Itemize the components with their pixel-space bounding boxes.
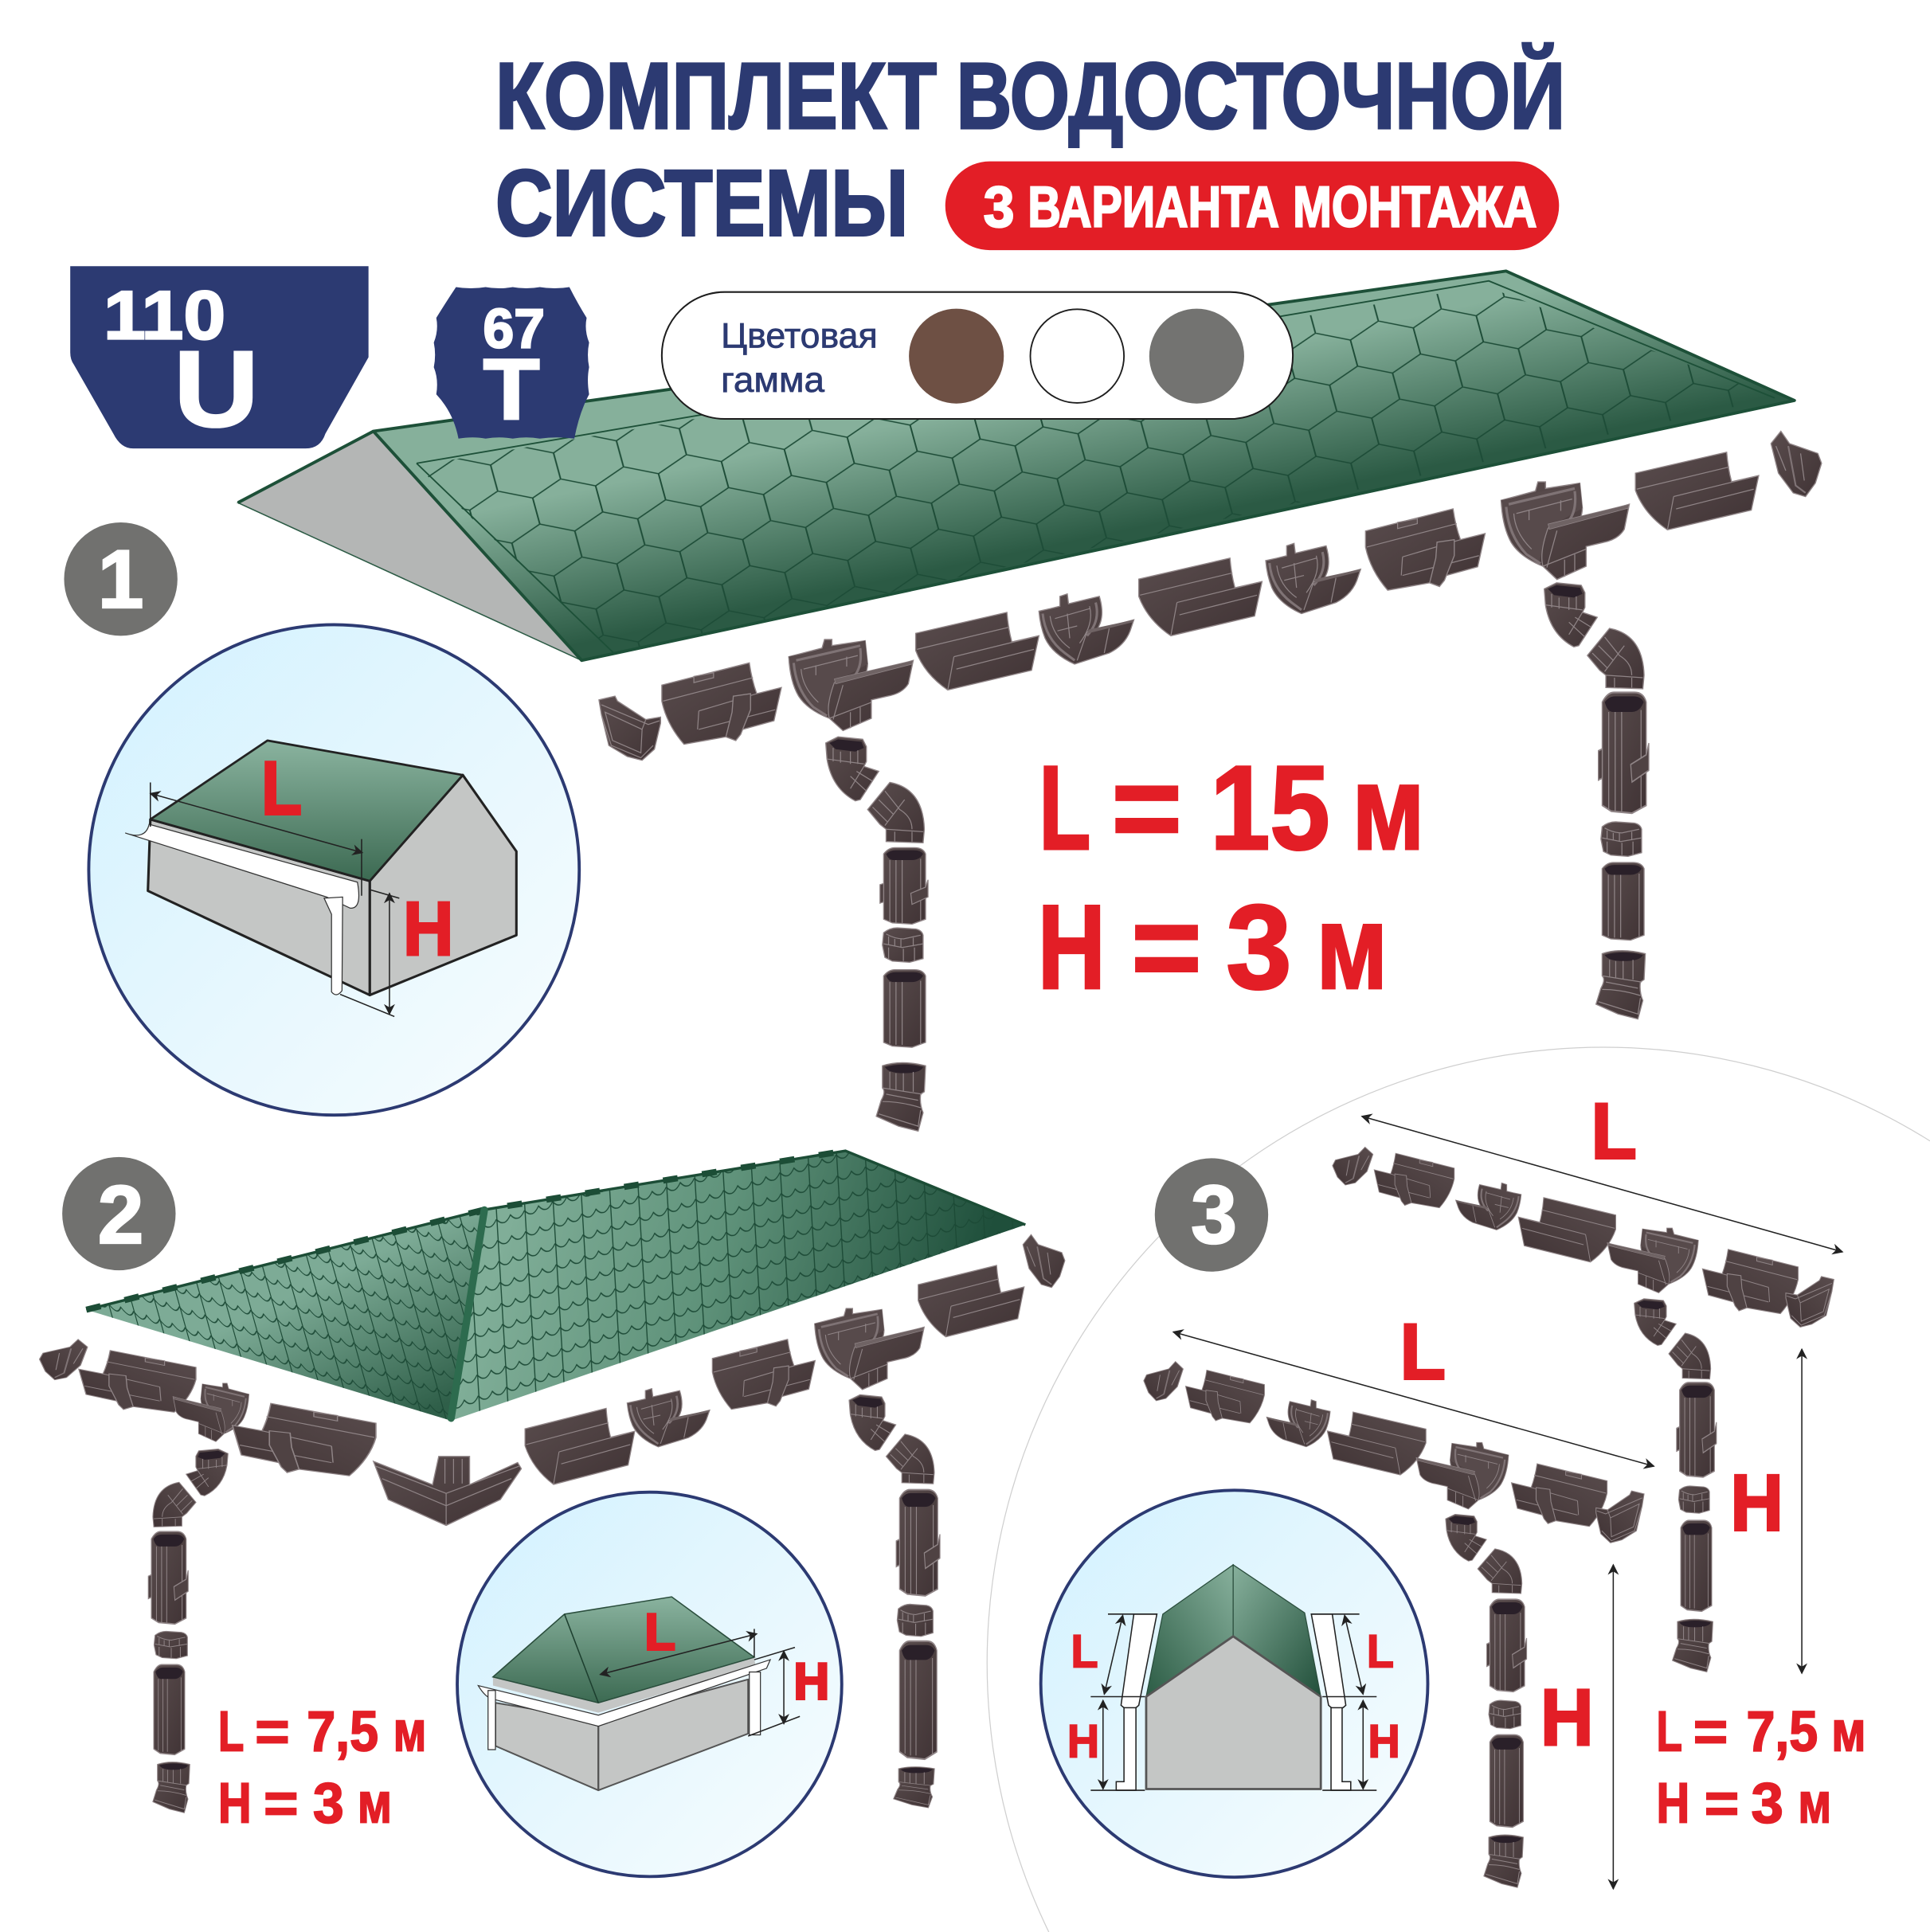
dimension H: H bbox=[403, 886, 453, 972]
dimension L: L bbox=[261, 746, 302, 831]
scheme 1 dimensions bbox=[1038, 741, 1425, 1014]
L = 7,5 м: м bbox=[1831, 1701, 1866, 1764]
end cap bbox=[599, 696, 660, 761]
number 1: 1 bbox=[98, 533, 143, 625]
L = 7,5 м: L bbox=[1657, 1701, 1682, 1764]
inset 2: hip roof house bbox=[457, 1492, 842, 1876]
inset 3: gable end view bbox=[1041, 1490, 1427, 1877]
dimension L bbox=[601, 1603, 757, 1675]
title: КОМПЛЕКТ bbox=[495, 44, 937, 148]
number 2: 2 bbox=[98, 1168, 143, 1261]
colour range label: Цветовая bbox=[721, 315, 878, 355]
connector bbox=[1039, 594, 1133, 664]
connector bbox=[627, 1389, 710, 1447]
L = 15 м: м bbox=[1352, 741, 1425, 874]
dimension H bbox=[748, 1648, 829, 1736]
gutter bbox=[1512, 1464, 1607, 1527]
end cap bbox=[1023, 1234, 1065, 1288]
L = 15 м: 15 bbox=[1210, 741, 1329, 874]
H = 3 м: 3 bbox=[313, 1772, 344, 1835]
L = 15 м bbox=[1039, 741, 1425, 874]
white gutter and pipe bbox=[125, 824, 358, 995]
scheme 2 dimensions bbox=[218, 1701, 426, 1835]
scheme 3 lower gutter line bbox=[1144, 1362, 1644, 1543]
left gutter and pipe bbox=[1116, 1614, 1157, 1790]
right dimensions bbox=[1311, 1614, 1400, 1790]
scheme 3 upper gutter line bbox=[1333, 1147, 1834, 1327]
badge: 67 T downpipe bbox=[434, 287, 589, 439]
right gutter and pipe bbox=[1311, 1614, 1351, 1790]
gutter bbox=[712, 1339, 815, 1410]
gutter bbox=[1702, 1250, 1798, 1314]
colour range label bbox=[721, 315, 878, 400]
gutter bbox=[525, 1408, 635, 1484]
left dimensions bbox=[1067, 1614, 1156, 1790]
funnel bbox=[1607, 1228, 1698, 1293]
scheme 3 upper L arrow bbox=[1362, 1086, 1842, 1252]
dimension H bbox=[340, 886, 453, 1016]
gutter bbox=[233, 1403, 376, 1476]
H = 3 м bbox=[218, 1772, 392, 1835]
scheme 3 lower H arrow: H bbox=[1540, 1673, 1594, 1762]
dimension L: L bbox=[644, 1603, 675, 1661]
L = 7,5 м: = bbox=[255, 1701, 290, 1764]
H = 3 м bbox=[1038, 880, 1388, 1014]
H = 3 м: м bbox=[358, 1772, 392, 1835]
scheme 2 left downpipe bbox=[148, 1449, 228, 1813]
L = 7,5 м: 7,5 bbox=[307, 1701, 378, 1764]
left dimensions: H bbox=[1067, 1715, 1099, 1767]
gutter bbox=[1635, 452, 1759, 530]
badge: 3 mounting options: МОНТАЖА bbox=[1293, 175, 1537, 240]
dimension L bbox=[151, 746, 362, 896]
title: СИСТЕМЫ bbox=[495, 151, 908, 256]
dimension H: H bbox=[793, 1652, 829, 1711]
connector bbox=[1266, 543, 1360, 614]
scheme 1 right downpipe bbox=[1544, 583, 1649, 1019]
H = 3 м: 3 bbox=[1227, 880, 1292, 1014]
end cap bbox=[1333, 1147, 1373, 1185]
end cap bbox=[1144, 1362, 1183, 1401]
swatch: brown bbox=[909, 309, 1004, 404]
gutter bbox=[662, 663, 781, 745]
L = 7,5 м bbox=[1657, 1701, 1866, 1764]
inset 1: gable house bbox=[88, 624, 579, 1115]
badge: 110 U gutter: 110 bbox=[104, 277, 225, 354]
funnel bbox=[173, 1383, 249, 1441]
scheme 3 dimensions bbox=[1657, 1701, 1866, 1835]
gutter bbox=[1365, 509, 1485, 590]
gutter bbox=[1185, 1370, 1264, 1423]
end cap bbox=[1786, 1277, 1834, 1327]
end cap bbox=[40, 1339, 88, 1380]
gutter bbox=[1518, 1198, 1615, 1262]
L = 15 м: = bbox=[1112, 741, 1182, 874]
H = 3 м bbox=[1657, 1772, 1831, 1835]
funnel bbox=[1501, 482, 1630, 580]
title bbox=[495, 44, 1565, 256]
L = 7,5 м bbox=[218, 1701, 426, 1764]
roof 1 bbox=[238, 271, 1795, 660]
badge: 3 mounting options: 3 bbox=[984, 175, 1014, 240]
number 2 bbox=[62, 1157, 175, 1270]
roof 2 bbox=[86, 1151, 1025, 1421]
H = 3 м: = bbox=[264, 1772, 298, 1835]
H = 3 м: H bbox=[1038, 880, 1106, 1014]
corner piece bbox=[374, 1457, 521, 1525]
left dimensions: L bbox=[1071, 1625, 1098, 1677]
end cap bbox=[1596, 1491, 1644, 1543]
L = 15 м: L bbox=[1039, 741, 1090, 874]
scheme 1 gutter line bbox=[599, 432, 1822, 761]
connector bbox=[1266, 1400, 1330, 1447]
funnel bbox=[789, 639, 914, 730]
H = 3 м: = bbox=[1131, 880, 1202, 1014]
number 3 bbox=[1155, 1158, 1268, 1272]
H = 3 м: 3 bbox=[1752, 1772, 1783, 1835]
panel: colour range bbox=[662, 292, 1293, 419]
badge: 3 mounting options: ВАРИАНТА bbox=[1028, 175, 1279, 240]
scheme 3 upper L arrow: L bbox=[1591, 1086, 1637, 1175]
scheme 1 left downpipe bbox=[826, 737, 928, 1131]
gutter bbox=[916, 612, 1039, 690]
colour range label: гамма bbox=[721, 359, 824, 400]
scheme 3 upper H arrow: H bbox=[1730, 1459, 1783, 1548]
scheme 2 right downpipe bbox=[849, 1394, 940, 1808]
scheme 3 upper downpipe bbox=[1634, 1299, 1717, 1672]
L = 7,5 м: м bbox=[393, 1701, 426, 1764]
right dimensions: H bbox=[1368, 1715, 1400, 1767]
scheme 3 lower downpipe bbox=[1446, 1515, 1527, 1887]
H = 3 м: = bbox=[1705, 1772, 1739, 1835]
end cap bbox=[1771, 432, 1822, 497]
scheme 3 lower L arrow bbox=[1173, 1307, 1654, 1466]
gutter bbox=[79, 1351, 196, 1412]
badge: 110 U gutter: U bbox=[174, 328, 259, 449]
L = 7,5 м: 7,5 bbox=[1746, 1701, 1818, 1764]
right dimensions: L bbox=[1367, 1625, 1394, 1677]
H = 3 м: H bbox=[218, 1772, 252, 1835]
badge: 67 T downpipe: T bbox=[483, 341, 540, 437]
number 1 bbox=[64, 522, 178, 636]
funnel bbox=[1416, 1442, 1509, 1509]
badge: 3 mounting options bbox=[945, 162, 1559, 250]
L = 7,5 м: = bbox=[1693, 1701, 1728, 1764]
number 3: 3 bbox=[1191, 1168, 1237, 1261]
badge: 110 U gutter bbox=[70, 266, 369, 449]
gutter bbox=[918, 1265, 1024, 1337]
H = 3 м: H bbox=[1657, 1772, 1689, 1835]
funnel bbox=[815, 1308, 924, 1390]
scheme 2 gutter line bbox=[40, 1234, 1065, 1525]
connector bbox=[1456, 1183, 1521, 1230]
thin arc behind scheme 3 bbox=[987, 1047, 1930, 1932]
H = 3 м: м bbox=[1798, 1772, 1831, 1835]
scheme 3 lower L arrow: L bbox=[1400, 1307, 1446, 1395]
swatch: white bbox=[1031, 309, 1124, 403]
title: ВОДОСТОЧНОЙ bbox=[957, 44, 1565, 148]
swatch: grey bbox=[1149, 309, 1244, 404]
badge: 67 T downpipe: 67 bbox=[483, 297, 545, 359]
gutter bbox=[1327, 1412, 1426, 1475]
gutter bbox=[1139, 558, 1262, 636]
gutter bbox=[1374, 1153, 1454, 1208]
L = 7,5 м: L bbox=[218, 1701, 244, 1764]
H = 3 м: м bbox=[1316, 880, 1388, 1014]
